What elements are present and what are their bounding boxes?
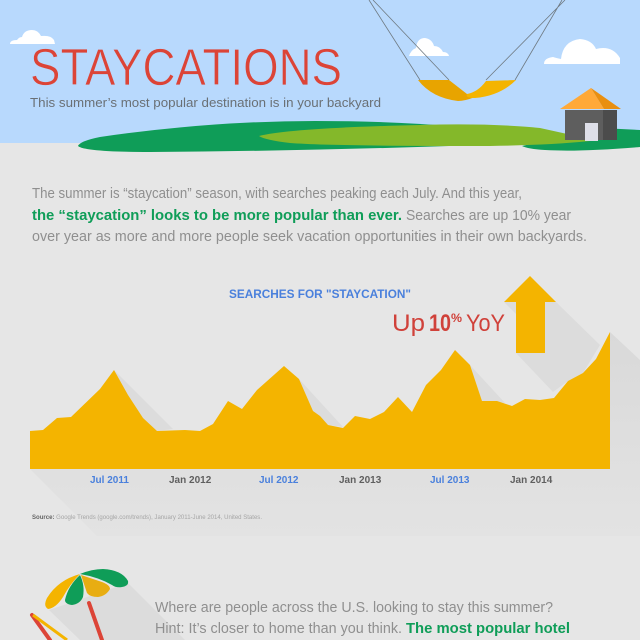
text block: intro: The summer is “staycation” season, with searches peaking each July. And this year, <box>32 185 522 202</box>
title: STAYCATIONS <box>30 39 342 97</box>
text block: intro <box>32 185 587 245</box>
callout: up 10% <box>392 310 505 337</box>
x axis labels: Jul 2012 <box>259 475 299 486</box>
icon: cloud center <box>409 38 449 56</box>
icon: up arrow <box>504 276 556 353</box>
source note: Source: Google Trends (google.com/trends), January 2011-June 2014, United States. <box>32 515 262 521</box>
text block: intro: Searches are up 10% year <box>406 207 571 224</box>
x axis labels <box>90 475 553 486</box>
subtitle: This summer’s most popular destination is in your backyard <box>30 95 381 110</box>
panel: sky header <box>0 0 640 152</box>
callout: up 10%: YoY <box>466 310 505 337</box>
area chart <box>30 332 610 469</box>
x axis labels: Jul 2011 <box>90 475 129 486</box>
text block: hotel: Where are people across the U.S. looking to stay this summer? <box>155 599 553 616</box>
icon: cloud left <box>10 30 55 44</box>
x axis labels: Jan 2014 <box>510 475 553 486</box>
icon: hammock <box>369 0 565 101</box>
icon: cloud right <box>544 39 620 64</box>
text block: intro: over year as more and more people seek vacation opportunities in their own backyards. <box>32 228 587 245</box>
icon: beach umbrella <box>32 569 185 640</box>
icon: dark green hill <box>78 121 449 152</box>
text block: hotel: The most popular hotel <box>406 620 570 637</box>
x axis labels: Jan 2013 <box>339 475 382 486</box>
callout: up 10%: % <box>451 311 462 325</box>
text block: hotel <box>155 599 570 637</box>
chart heading: SEARCHES FOR "STAYCATION" <box>229 287 411 301</box>
icon: dark green hill right <box>522 128 640 151</box>
x axis labels: Jul 2013 <box>430 475 470 486</box>
icon: house <box>560 88 621 141</box>
icon: light green hill <box>259 124 590 146</box>
callout: up 10%: Up <box>392 310 425 337</box>
callout: up 10%: 10 <box>429 310 451 337</box>
chart shadows <box>30 302 640 536</box>
text block: hotel: Hint: It’s closer to home than you think. <box>155 620 402 637</box>
x axis labels: Jan 2012 <box>169 475 212 486</box>
text block: intro: the “staycation” looks to be more popular than ever. <box>32 207 402 224</box>
